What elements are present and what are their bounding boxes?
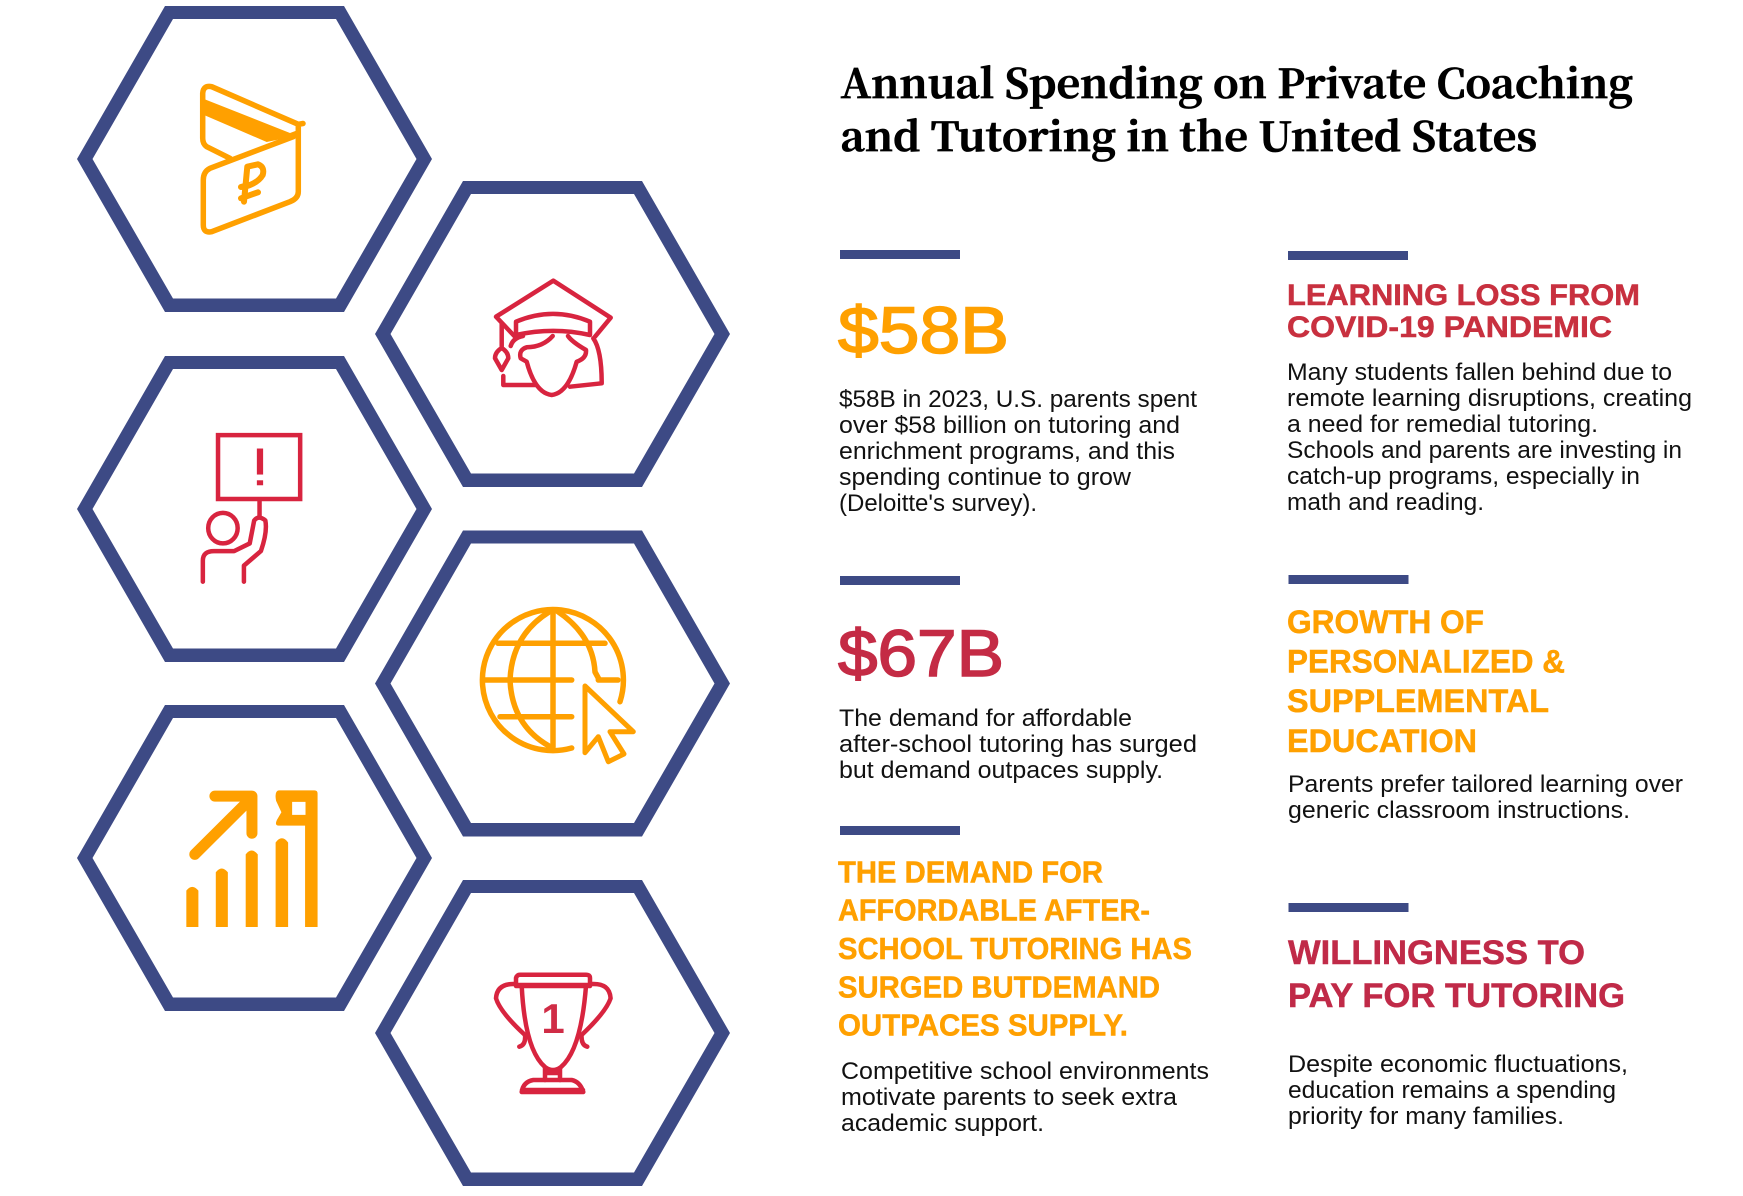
panel: personalized education [1287,575,1683,824]
heading: demand: SURGED BUTDEMAND [838,970,1160,1004]
heading: learning loss [1287,279,1640,344]
heading: learning loss: COVID-19 PANDEMIC [1287,311,1612,344]
heading: growth: GROWTH OF [1287,604,1484,640]
heading: growth: PERSONALIZED & [1287,644,1565,680]
heading: willingness: WILLINGNESS TO [1288,934,1585,972]
text: learning loss description: a need for remedial tutoring. [1287,411,1598,438]
text: learning loss description: remote learning disruptions, creating [1287,385,1692,412]
hexagon frame: wallet [77,6,432,312]
text: $67B description [839,705,1197,784]
text: learning loss description: Schools and parents are investing in [1287,437,1682,464]
text: $58B description: spending continue to grow [839,464,1132,491]
heading: growth: EDUCATION [1287,723,1477,759]
trophy number: 1 [541,995,565,1042]
text: willingness description: education remains a spending [1288,1077,1616,1104]
hexagon frame: alert [77,356,432,662]
icon: globe with cursor [482,610,633,762]
icon: rising bar chart with arrow [186,790,318,927]
icon: trophy [496,975,611,1092]
panel: $58B stat [838,250,1197,517]
heading: demand: SCHOOL TUTORING HAS [838,931,1192,966]
hexagon frame: trophy [375,880,730,1186]
title: Annual Spending on Private Coaching [840,53,1633,110]
text: $67B description: The demand for affordable [839,705,1132,732]
text: willingness description: Despite economic fluctuations, [1288,1051,1628,1078]
heading: willingness: PAY FOR TUTORING [1288,977,1625,1015]
text: learning loss description: Many students fallen behind due to [1287,359,1672,386]
title: and Tutoring in the United States [840,106,1537,163]
panel: $67B stat [838,576,1197,784]
heading: willingness [1288,934,1625,1015]
text: competitive environments: academic support. [841,1110,1044,1137]
text: learning loss description: math and reading. [1287,489,1484,516]
text: growth description: Parents prefer tailored learning over [1288,771,1683,798]
text: willingness description [1288,1051,1628,1130]
heading: demand: OUTPACES SUPPLY. [838,1008,1128,1042]
text: competitive environments: Competitive school environments [841,1058,1209,1085]
text: $58B description: $58B in 2023, U.S. parents spent [839,386,1197,413]
heading: growth [1287,604,1565,759]
text: growth description: generic classroom instructions. [1288,797,1630,824]
text: $58B description: (Deloitte's survey). [839,490,1037,517]
icon: wallet with ruble [203,86,303,232]
heading: learning loss: LEARNING LOSS FROM [1287,279,1640,312]
text: competitive environments [841,1058,1209,1137]
text: competitive environments: motivate parents to seek extra [841,1084,1178,1111]
text: $67B description: but demand outpaces supply. [839,757,1163,784]
heading: demand: AFFORDABLE AFTER- [838,892,1150,928]
heading: demand [838,854,1192,1042]
hexagon frame: growth chart [77,705,432,1011]
hexagon frame: graduate [375,181,730,487]
text: growth description [1288,771,1683,824]
heading: growth: SUPPLEMENTAL [1287,683,1549,719]
text: $58B description: over $58 billion on tutoring and [839,412,1180,439]
text: $67B description: after-school tutoring has surged [839,731,1197,758]
title [840,53,1633,163]
stat: $58B: $58B [838,293,1009,367]
panel: demand for after-school tutoring [838,826,1209,1137]
panel: willingness to pay [1288,903,1628,1130]
text: willingness description: priority for many families. [1288,1103,1564,1130]
icon: person holding alert sign [203,435,300,582]
text: learning loss description: catch-up programs, especially in [1287,463,1640,490]
text: learning loss description [1287,359,1692,516]
hexagon frame: globe [375,530,730,836]
stat: $67B: $67B [838,616,1004,690]
text: $58B description [839,386,1197,517]
panel: learning loss [1287,251,1692,516]
text: $58B description: enrichment programs, and this [839,438,1175,465]
icon: graduate [495,281,611,395]
heading: demand: THE DEMAND FOR [838,854,1103,890]
